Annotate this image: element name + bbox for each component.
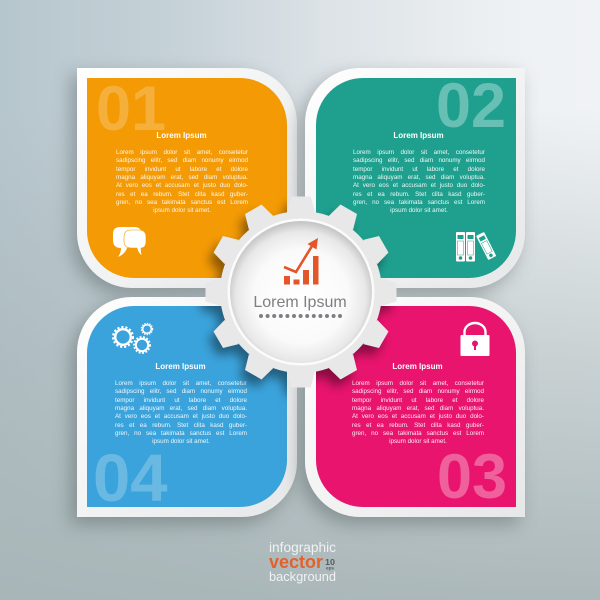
body text: Lorem ipsum dolor sit amet, consetetur xyxy=(116,149,248,156)
icon: growth chart xyxy=(284,238,318,284)
body text: Lorem ipsum dolor sit amet, consetetur xyxy=(352,380,484,387)
center title: Lorem Ipsum xyxy=(253,294,347,311)
body text xyxy=(115,380,247,445)
body text: res et ea rebum. Stet clita kasd guber- xyxy=(353,191,485,198)
footer: infographic vector background: background xyxy=(269,569,336,584)
number 04: 04 xyxy=(93,441,168,516)
body text: gren, no sea takimata sanctus est Lorem xyxy=(116,199,248,206)
central gear xyxy=(195,196,398,400)
heading: Lorem Ipsum xyxy=(155,362,206,371)
body text: At vero eos et accusam et justo duo dolo- xyxy=(352,413,484,420)
number 03: 03 xyxy=(437,442,507,512)
footer: infographic vector background: eps xyxy=(326,566,335,570)
footer: infographic vector background xyxy=(269,540,336,584)
body text: Lorem ipsum dolor sit amet, consetetur xyxy=(353,149,485,156)
body text: magna aliquyam erat, sed diam voluptua. xyxy=(116,174,248,181)
icon: binders xyxy=(456,232,496,262)
body text: sadipscing elitr, sed diam nonumy eirmod xyxy=(115,388,247,395)
body text: At vero eos et accusam et justo duo dolo- xyxy=(353,182,485,189)
body text: res et ea rebum. Stet clita kasd guber- xyxy=(115,422,247,429)
body text: magna aliquyam erat, sed diam voluptua. xyxy=(353,174,485,181)
body text: res et ea rebum. Stet clita kasd guber- xyxy=(352,422,484,429)
body text: ipsum dolor sit amet. xyxy=(389,438,447,445)
heading: Lorem Ipsum xyxy=(156,131,207,140)
body text: ipsum dolor sit amet. xyxy=(390,207,448,214)
body text: gren, no sea takimata sanctus est Lorem xyxy=(353,199,485,206)
icon: padlock xyxy=(460,322,490,356)
body text: ipsum dolor sit amet. xyxy=(152,438,210,445)
number 02: 02 xyxy=(436,71,506,141)
dotted line xyxy=(259,314,342,318)
heading: Lorem Ipsum xyxy=(392,362,443,371)
footer: infographic vector background: infographic xyxy=(269,540,336,555)
panel 04: blue xyxy=(62,296,299,532)
body text: sadipscing elitr, sed diam nonumy eirmod xyxy=(352,388,484,395)
body text: At vero eos et accusam et justo duo dolo- xyxy=(115,413,247,420)
body text: sadipscing elitr, sed diam nonumy eirmod xyxy=(116,157,248,164)
body text: gren, no sea takimata sanctus est Lorem xyxy=(352,430,484,437)
icon: cogs xyxy=(112,322,154,354)
panel 01: orange xyxy=(62,65,300,301)
body text: gren, no sea takimata sanctus est Lorem xyxy=(115,430,247,437)
body text: Lorem ipsum dolor sit amet, consetetur xyxy=(115,380,247,387)
panel 03: pink xyxy=(288,296,528,533)
footer: infographic vector background: vector xyxy=(269,552,323,572)
body text: magna aliquyam erat, sed diam voluptua. xyxy=(352,405,484,412)
body text xyxy=(353,149,485,214)
number 01: 01 xyxy=(96,74,166,144)
body text xyxy=(352,380,484,445)
body text: sadipscing elitr, sed diam nonumy eirmod xyxy=(353,157,485,164)
body text xyxy=(116,149,248,214)
body text: tempor invidunt ut labore et dolore xyxy=(115,397,247,404)
heading: Lorem Ipsum xyxy=(393,131,444,140)
footer: infographic vector background: 10 xyxy=(325,558,336,567)
body text: At vero eos et accusam et justo duo dolo- xyxy=(116,182,248,189)
body text: tempor invidunt ut labore et dolore xyxy=(353,166,485,173)
panel 02: teal xyxy=(288,64,530,300)
body text: ipsum dolor sit amet. xyxy=(153,207,211,214)
body text: tempor invidunt ut labore et dolore xyxy=(352,397,484,404)
body text: magna aliquyam erat, sed diam voluptua. xyxy=(115,405,247,412)
icon: speech bubbles xyxy=(113,227,146,257)
body text: res et ea rebum. Stet clita kasd guber- xyxy=(116,191,248,198)
body text: tempor invidunt ut labore et dolore xyxy=(116,166,248,173)
